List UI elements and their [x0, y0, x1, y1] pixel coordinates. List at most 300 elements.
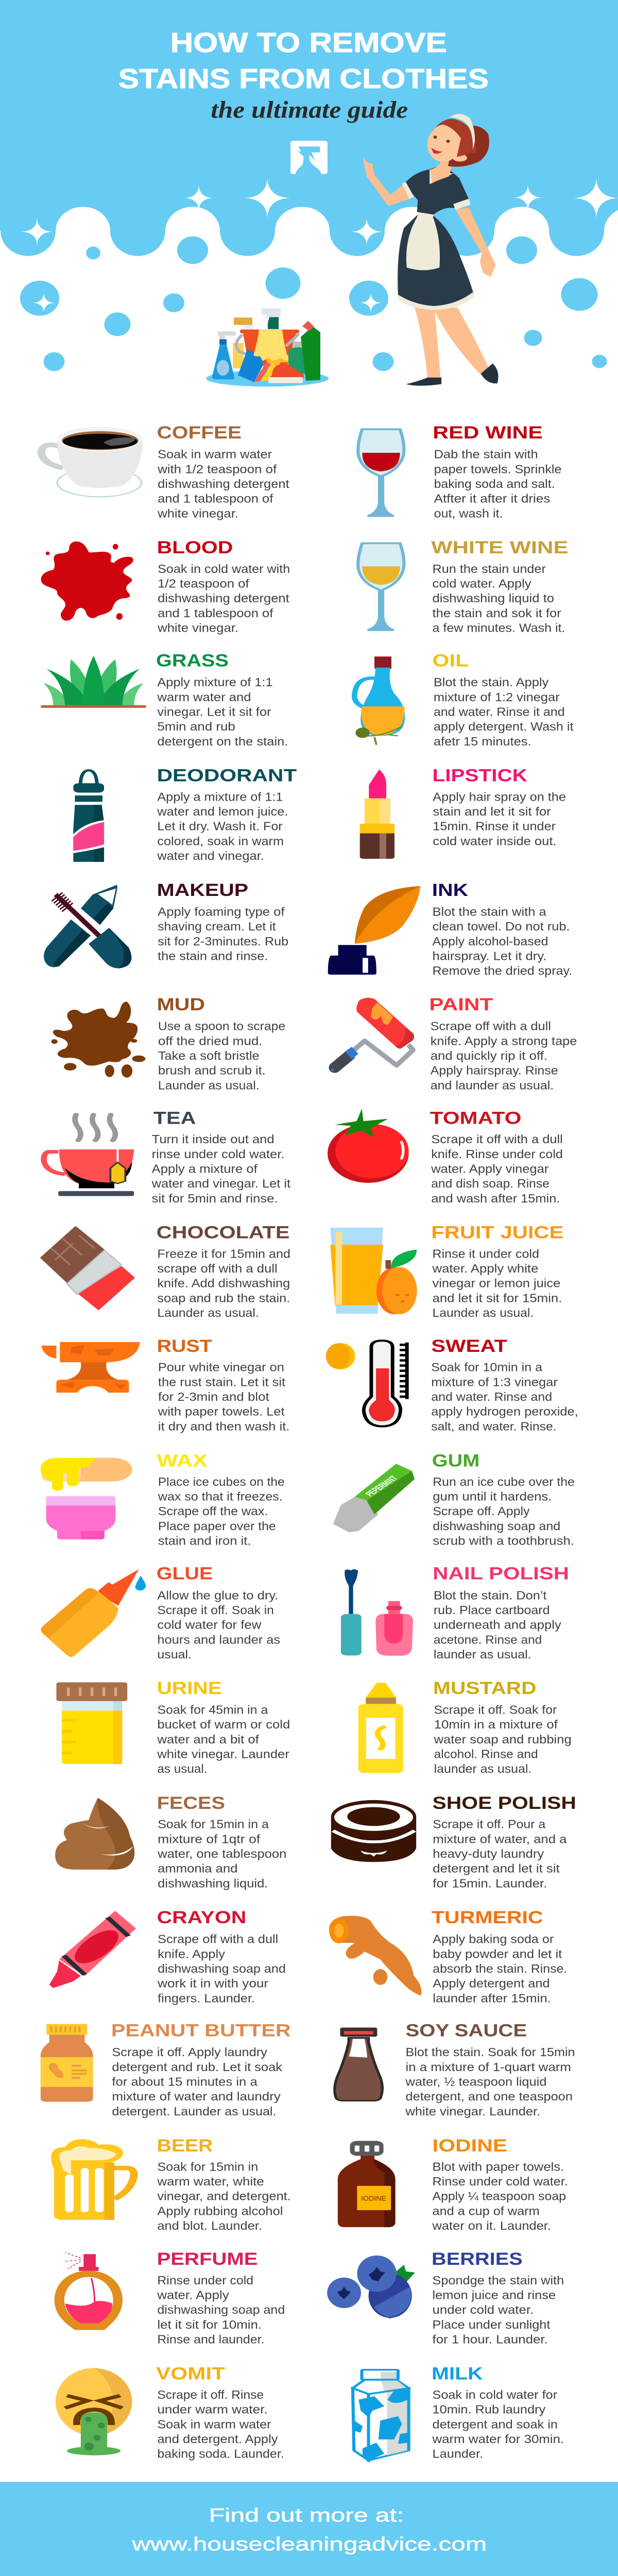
body text: Soak in cold water for — [433, 2387, 557, 2401]
body text: 10min in a mixture of — [434, 1718, 558, 1732]
card: lipstick — [360, 766, 566, 859]
body text: Take a soft bristle — [158, 1048, 260, 1062]
body text — [158, 1475, 285, 1548]
body text: Launder. — [433, 2447, 483, 2461]
heading: SOY SAUCE — [405, 2021, 527, 2040]
body text — [158, 905, 288, 963]
icon: cleaning bucket and supplies — [206, 308, 329, 386]
icon: makeup pencil and mascara — [44, 885, 131, 969]
body text: for about 15 minutes in a — [112, 2075, 258, 2089]
body text: dishwashing soap and — [433, 1519, 560, 1533]
body text: a few minutes. Wash it. — [433, 621, 565, 635]
card: paint — [331, 994, 577, 1092]
body text: Apply baking soda or — [433, 1932, 554, 1946]
heading: TEA — [153, 1108, 196, 1128]
body text: scrub with a toothbrush. — [433, 1534, 574, 1548]
body text: cold water. Apply — [433, 577, 531, 590]
body text: paper towels. Sprinkle — [434, 462, 562, 476]
body text: dishwashing soap and — [158, 1962, 286, 1975]
icon: urine sample jar — [56, 1682, 127, 1764]
body text: stain and let it sit for — [433, 805, 551, 818]
body text: Scrape off with a dull — [431, 1019, 551, 1033]
body text: and launder as usual. — [431, 1078, 554, 1092]
body text: Soak in warm water — [157, 2417, 271, 2431]
body text — [434, 675, 574, 748]
body text: scrape off with a dull — [157, 1261, 278, 1275]
body text: 5min and rub — [157, 720, 235, 734]
card: deodorant — [73, 766, 297, 862]
heading: MILK — [432, 2363, 483, 2383]
card: berries — [327, 2249, 564, 2346]
heading: COFFEE — [157, 422, 242, 443]
icon: rusty anvil — [41, 1342, 140, 1393]
body text: cold water inside out. — [433, 834, 557, 848]
body text: for 1 hour. Launder. — [433, 2332, 548, 2346]
body text: acetone. Rinse and — [434, 1633, 542, 1647]
icon: perfume bottle — [55, 2252, 123, 2330]
body text: water soap and rubbing — [433, 1732, 572, 1746]
card: perfume — [55, 2249, 285, 2346]
body text: the stain and rinse. — [158, 949, 268, 963]
body text: water, ½ teaspoon liquid — [405, 2075, 546, 2089]
body text — [405, 2045, 575, 2118]
body text: water and vinegar. Let it — [151, 1177, 290, 1191]
card: tea — [44, 1108, 290, 1205]
body text: launder as usual. — [434, 1762, 531, 1776]
illustration: maid — [363, 114, 499, 386]
body text: out, wash it. — [434, 506, 503, 520]
heading: RED WINE — [433, 422, 543, 443]
icon: iodine bottle — [338, 2141, 396, 2227]
icon: nail polish — [341, 1569, 413, 1656]
card: blood — [41, 537, 290, 635]
heading: SWEAT — [431, 1336, 507, 1356]
icon: shoe polish tin — [331, 1800, 416, 1862]
body text: water and lemon juice. — [157, 805, 288, 818]
body text: water. Apply vinegar — [431, 1162, 548, 1176]
body text: apply hydrogen peroxide, — [431, 1404, 578, 1418]
body text: mixture of water and laundry — [112, 2090, 281, 2104]
body text: Scrape off the wax. — [158, 1504, 268, 1518]
body text: and quickly rip it off. — [431, 1048, 547, 1062]
body text: Blot the stain. Apply — [434, 675, 548, 689]
body text: hours and launder as — [157, 1633, 280, 1647]
body text: Soak for 45min in a — [157, 1703, 268, 1717]
card: wax — [41, 1450, 285, 1548]
icon: tea cup — [44, 1114, 134, 1196]
body text: for 2-3min and blot — [158, 1390, 269, 1403]
logo: spray bottle — [290, 141, 328, 174]
body text: Launder as usual. — [158, 1078, 260, 1092]
heading: BLOOD — [157, 537, 233, 557]
heading: VOMIT — [156, 2363, 225, 2383]
card: tomato — [328, 1108, 563, 1205]
icon: feces — [55, 1798, 134, 1870]
body text: detergent, and one teaspoon — [405, 2090, 573, 2104]
footer text — [131, 2505, 487, 2555]
sparkles — [21, 178, 618, 313]
heading: CHOCOLATE — [157, 1223, 289, 1242]
icon: paint roller — [331, 997, 414, 1071]
card: oil — [354, 650, 574, 748]
body text: water. Apply — [157, 2288, 229, 2302]
body text: hairspray. Let it dry. — [433, 949, 546, 963]
body text: the rust stain. Let it sit — [158, 1375, 285, 1389]
body text: let it sit for 10min. — [157, 2317, 262, 2331]
body text — [157, 1247, 290, 1319]
body text: Rinse under cold — [157, 2273, 253, 2287]
body text: alcohol. Rinse and — [434, 1747, 538, 1761]
body text: knife. Apply a strong tape — [431, 1034, 577, 1048]
heading: LIPSTICK — [433, 766, 527, 785]
icon: juice glass and orange — [330, 1228, 417, 1314]
heading: GLUE — [157, 1564, 213, 1583]
header panel — [0, 0, 618, 386]
icon: crayon — [49, 1911, 136, 1988]
body text — [433, 1817, 568, 1890]
body text: under warm water. — [157, 2402, 268, 2416]
body text: Apply hairspray. Rinse — [431, 1063, 558, 1077]
body text: mixture of water, and a — [433, 1832, 568, 1846]
body text: launder after 15min. — [433, 1991, 551, 2005]
body text: Apply a mixture of — [152, 1162, 258, 1176]
body text: heavy-duty laundry — [433, 1846, 544, 1860]
body text — [434, 1588, 561, 1661]
body text: rinse under cold water. — [152, 1147, 285, 1161]
card: mud — [51, 994, 285, 1092]
card: coffee — [41, 422, 289, 520]
body text — [157, 447, 289, 520]
icon: peanut butter jar — [41, 2024, 93, 2102]
body text: Apply rubbing alcohol — [157, 2204, 283, 2218]
body text — [157, 1703, 290, 1776]
card: gum — [333, 1450, 575, 1548]
body text: usual. — [157, 1647, 192, 1661]
body text: Scrape it off. Soak in — [157, 1603, 274, 1617]
title — [118, 27, 489, 94]
icon: vomiting face — [56, 2368, 132, 2455]
footer text: Find out more at: — [209, 2505, 404, 2526]
heading: MAKEUP — [157, 880, 248, 900]
body text — [433, 905, 572, 978]
body text: dishwashing liquid. — [158, 1876, 268, 1890]
icon: iodine bottle: IODINE — [361, 2195, 386, 2202]
body text: Launder as usual. — [157, 1306, 259, 1319]
body text: Apply a mixture of 1:1 — [157, 790, 283, 804]
card: glue — [41, 1564, 280, 1661]
body text: Allow the glue to dry. — [157, 1588, 278, 1602]
icon: blueberries — [327, 2256, 415, 2318]
body text: with paper towels. Let — [158, 1404, 285, 1418]
body text: gum until it hardens. — [433, 1489, 552, 1503]
body text: soap and rub the stain. — [157, 1291, 290, 1305]
heading: TURMERIC — [432, 1907, 543, 1927]
body text: Rinse it under cold — [433, 1247, 539, 1261]
heading: INK — [432, 880, 468, 900]
card: sweat — [326, 1336, 578, 1433]
icon: glue bottle — [41, 1569, 146, 1657]
heading: FECES — [157, 1793, 225, 1813]
body text: as usual. — [157, 1762, 208, 1776]
body text: Scrape it off. Pour a — [433, 1817, 546, 1831]
card: mustard — [358, 1678, 572, 1776]
heading: BERRIES — [432, 2249, 523, 2269]
body text: Soak for 15min in — [157, 2160, 258, 2174]
heading: FRUIT JUICE — [431, 1223, 563, 1242]
body text: 15min. Rinse it under — [433, 819, 556, 833]
body text: Blot the stain. Soak for 15min — [405, 2045, 575, 2059]
body text: Apply hair spray on the — [433, 790, 566, 804]
heading: PEANUT BUTTER — [111, 2021, 291, 2040]
body text: Pour white vinegar on — [158, 1360, 284, 1374]
body text: water, one tablespoon — [157, 1846, 286, 1860]
body text: dishwashing detergent — [158, 591, 289, 605]
body text: it dry and then wash it. — [158, 1419, 289, 1433]
body text: Scrape off. Apply — [433, 1504, 530, 1518]
body text: rub. Place cartboard — [434, 1603, 550, 1617]
body text — [433, 1703, 572, 1776]
blue dripping background — [0, 0, 618, 256]
body text: with 1/2 teaspoon of — [157, 462, 277, 476]
card: chocolate — [41, 1223, 290, 1319]
body text: Soak for 15min in a — [158, 1817, 269, 1831]
body text: in a mixture of 1-quart warm — [405, 2060, 571, 2074]
card: white wine — [358, 537, 569, 635]
body text: knife. Apply — [158, 1947, 225, 1961]
body text: apply detergent. Wash it — [434, 720, 574, 734]
body text — [112, 2045, 282, 2118]
icon: chewing gum: PEPERMINT — [363, 1475, 400, 1498]
body text: warm water, white — [157, 2175, 264, 2188]
body text: baby powder and let it — [433, 1947, 562, 1961]
body text: the stain and sok it for — [433, 606, 561, 620]
body text: and water. Rinse and — [431, 1390, 552, 1403]
body text: launder as usual. — [434, 1647, 531, 1661]
body text: detergent. Launder as usual. — [112, 2104, 276, 2118]
heading: RUST — [157, 1336, 212, 1356]
body text — [157, 1932, 286, 2005]
body text: work it in with your — [157, 1976, 268, 1990]
body text — [432, 2160, 568, 2232]
body text: warm water for 30min. — [432, 2432, 564, 2446]
body text: vinegar or lemon juice — [433, 1276, 560, 1290]
body text — [433, 2273, 564, 2346]
bubbles — [20, 236, 607, 371]
body text — [432, 1247, 562, 1319]
body text: and wash after 15min. — [431, 1191, 560, 1205]
card: ink — [328, 880, 572, 978]
body text: cold water for few — [157, 1618, 262, 1632]
icon: coffee cup — [41, 427, 143, 497]
body text — [157, 2387, 284, 2461]
body text: and blot. Launder. — [157, 2219, 262, 2232]
body text — [151, 1132, 290, 1205]
body text: Place under sunlight — [433, 2317, 550, 2331]
card: nail polish — [341, 1564, 569, 1661]
body text: Scrape off with a dull — [158, 1932, 278, 1946]
heading: URINE — [157, 1678, 222, 1698]
heading: CRAYON — [157, 1907, 246, 1927]
body text: Scrape it off with a dull — [431, 1132, 563, 1146]
body text: Spondge the stain with — [433, 2273, 564, 2287]
card: shoe polish — [331, 1793, 576, 1890]
body text: stain and iron it. — [158, 1534, 251, 1548]
body text — [433, 790, 566, 848]
title: HOW TO REMOVE — [170, 27, 447, 58]
body text: Turn it inside out and — [152, 1132, 274, 1146]
body text: vinegar, and detergent. — [157, 2189, 291, 2203]
body text: Atfter it after it dries — [434, 492, 551, 505]
body text — [434, 447, 562, 520]
icon: candle wax — [41, 1458, 132, 1539]
body text: absorb the stain. Rinse. — [433, 1962, 567, 1975]
body text: and detergent. Apply — [157, 2432, 278, 2446]
body text: and let it sit for 15min. — [433, 1291, 562, 1305]
subtitle: the ultimate guide — [211, 97, 408, 123]
heading: MUD — [157, 994, 205, 1014]
icon: white wine glass — [358, 543, 404, 631]
body text: clean towel. Do not rub. — [433, 920, 570, 934]
heading: SHOE POLISH — [433, 1793, 576, 1813]
heading: GUM — [432, 1450, 479, 1470]
icon: grass — [41, 656, 146, 708]
icon: thermometer and sweat drop — [326, 1341, 409, 1426]
body text: dishwashing liquid to — [433, 591, 554, 605]
body text: Remove the dried spray. — [433, 964, 572, 978]
body text: Blot with paper towels. — [433, 2160, 564, 2174]
body text: white vinegar. — [157, 621, 238, 635]
body text: Place paper over the — [158, 1519, 276, 1533]
icon: oil bottle — [354, 656, 405, 745]
card: urine — [56, 1678, 290, 1776]
body text: mixture of 1qtr of — [158, 1832, 261, 1846]
card: grass — [41, 650, 288, 748]
heading: BEER — [157, 2136, 213, 2155]
body text: Blot the stain. Don’t — [434, 1588, 546, 1602]
body text — [158, 1360, 289, 1433]
body text: white vinegar. — [157, 506, 238, 520]
body text: knife. Add dishwashing — [157, 1276, 290, 1290]
body text: Scrape it off. Apply laundry — [112, 2045, 267, 2059]
body text: water and vinegar. — [157, 849, 264, 862]
heading: TOMATO — [430, 1108, 521, 1128]
body text — [431, 1360, 578, 1433]
body text — [431, 1019, 577, 1092]
body text: Soak for 10min in a — [431, 1360, 543, 1374]
heading: WAX — [157, 1450, 208, 1470]
body text: Freeze it for 15min and — [157, 1247, 290, 1261]
body text — [157, 1588, 280, 1661]
body text: white vinegar. Launder. — [405, 2104, 540, 2118]
body text: vinegar. Let it sit for — [157, 705, 271, 719]
icon: soy sauce bottle — [335, 2028, 382, 2100]
card: iodine — [338, 2136, 568, 2232]
body text: shaving cream. Let it — [158, 920, 276, 934]
body text: Scrape it off. Rinse — [157, 2387, 264, 2401]
body text: water on it. Launder. — [432, 2219, 551, 2232]
heading: OIL — [433, 650, 469, 670]
body text: Blot the stain with a — [433, 905, 547, 919]
body text: for 15min. Launder. — [433, 1876, 547, 1890]
body text: fingers. Launder. — [158, 1991, 255, 2005]
heading: DEODORANT — [157, 766, 297, 785]
body text: Launder as usual. — [433, 1306, 534, 1319]
icon: chocolate bar — [41, 1227, 134, 1310]
body text: 1/2 teaspoon of — [158, 577, 250, 590]
body text — [158, 1019, 285, 1092]
body text: and dish soap. Rinse — [431, 1177, 550, 1191]
body text: Use a spoon to scrape — [158, 1019, 285, 1033]
body text: off the dried mud. — [158, 1034, 263, 1048]
body text: colored, soak in warm — [157, 834, 284, 848]
body text: salt, and water. Rinse. — [431, 1419, 557, 1433]
body text: brush and scrub it. — [158, 1063, 266, 1077]
body text: underneath and apply — [434, 1618, 561, 1632]
body text: knife. Rinse under cold — [431, 1147, 563, 1161]
body text: warm water and — [157, 690, 251, 704]
icon: quill and ink bottle — [328, 886, 421, 975]
body text: dishwashing detergent — [158, 477, 289, 490]
body text: and water. Rinse it and — [434, 705, 565, 719]
card: beer — [51, 2136, 291, 2232]
footer panel — [0, 2482, 618, 2576]
body text: white vinegar. Launder — [157, 1747, 289, 1761]
body text — [157, 1817, 286, 1890]
footer text: www.housecleaningadvice.com — [131, 2534, 487, 2555]
body text: detergent and rub. Let it soak — [112, 2060, 282, 2074]
card: vomit — [56, 2363, 284, 2461]
body text: Rinse and launder. — [157, 2332, 265, 2346]
heading: NAIL POLISH — [433, 1564, 569, 1583]
body text: 10min. Rub laundry — [433, 2402, 545, 2416]
title: STAINS FROM CLOTHES — [118, 63, 489, 94]
body text: Apply foaming type of — [158, 905, 285, 919]
body text — [157, 675, 288, 748]
body text: Soak in warm water — [158, 447, 272, 461]
body text: Soak in cold water with — [158, 562, 290, 575]
body text: Dab the stain with — [434, 447, 538, 461]
card: crayon — [49, 1907, 286, 2005]
icon: beer mug — [51, 2139, 134, 2220]
body text: sit for 2-3minutes. Rub — [158, 934, 288, 948]
heading: GRASS — [156, 650, 229, 670]
body text — [157, 2160, 291, 2232]
body text: Place ice cubes on the — [158, 1475, 285, 1488]
card: fruit juice — [330, 1223, 563, 1319]
body text: lemon juice and rinse — [433, 2288, 556, 2302]
body text: Apply detergent and — [433, 1976, 550, 1990]
body text: baking soda. Launder. — [157, 2447, 284, 2461]
body text — [432, 2387, 564, 2461]
icon: mustard bottle — [358, 1683, 403, 1773]
body text: detergent on the stain. — [157, 734, 288, 748]
icon: chewing gum — [333, 1464, 415, 1532]
icon: milk carton — [353, 2370, 409, 2461]
heading: IODINE — [433, 2136, 507, 2155]
body text: Run the stain under — [433, 562, 546, 575]
body text: Rinse under cold water. — [433, 2175, 568, 2188]
body text: dishwashing soap and — [157, 2303, 285, 2317]
heading: MUSTARD — [433, 1678, 537, 1698]
body text: mixture of 1:2 vinegar — [434, 690, 560, 704]
card: soy sauce — [335, 2021, 575, 2118]
body text: Run an ice cube over the — [433, 1475, 575, 1488]
body text: baking soda and salt. — [434, 477, 555, 490]
body text: ammonia and — [158, 1861, 237, 1875]
icon: blood splat — [41, 541, 133, 621]
body text — [433, 1475, 575, 1548]
body text: under cold water. — [433, 2303, 534, 2317]
